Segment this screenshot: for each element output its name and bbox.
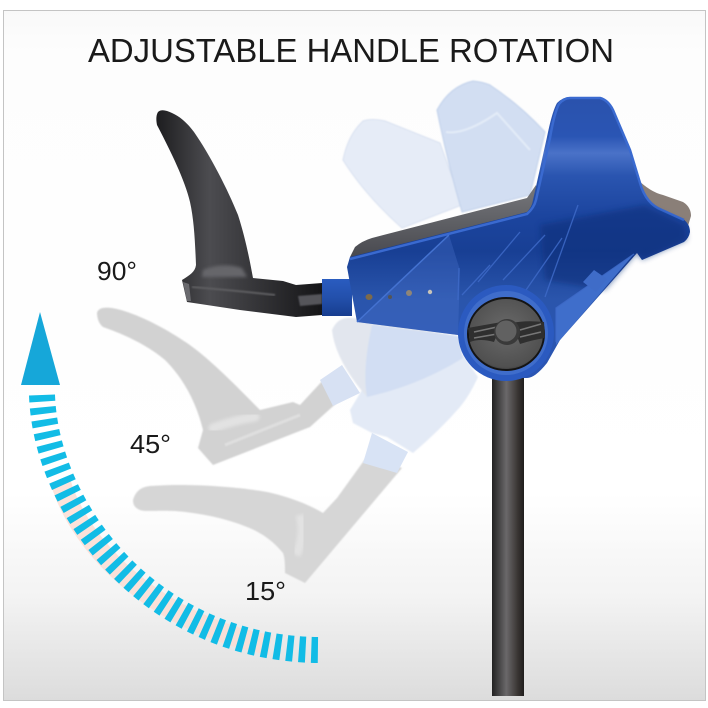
rib lines xyxy=(458,205,634,342)
blue tube connector xyxy=(322,279,352,316)
pivot ring xyxy=(458,285,554,381)
gauge pink underlay xyxy=(60,480,270,645)
rear grey pad xyxy=(636,178,691,226)
translucent lower wall xyxy=(357,235,460,335)
arrow head xyxy=(21,312,60,385)
cuff rim highlight xyxy=(350,98,684,259)
label: 45 degrees: 45° xyxy=(130,429,171,459)
pivot knob xyxy=(468,298,545,370)
gauge dashes xyxy=(42,395,318,650)
pole xyxy=(492,370,524,696)
rib button xyxy=(583,270,607,292)
label: 90 degrees: 90° xyxy=(97,256,137,286)
ghost: rotated cuff upper fan xyxy=(343,81,545,228)
adjustment holes xyxy=(366,290,432,300)
ghost: lower cuff fan xyxy=(332,318,478,453)
grey cuff pad xyxy=(350,185,540,262)
ghost handle: 15 degrees xyxy=(133,433,408,583)
blue cuff xyxy=(347,97,691,381)
black handle at 90 degrees xyxy=(156,110,322,317)
cuff lower shading xyxy=(540,205,687,290)
ghost handle: 45 degrees xyxy=(97,308,360,465)
title: ADJUSTABLE HANDLE ROTATION xyxy=(88,32,614,69)
label: 15 degrees: 15° xyxy=(245,576,286,606)
blue arrow gauge xyxy=(21,312,318,650)
cuff shell xyxy=(347,97,690,378)
lower flange xyxy=(556,254,634,345)
